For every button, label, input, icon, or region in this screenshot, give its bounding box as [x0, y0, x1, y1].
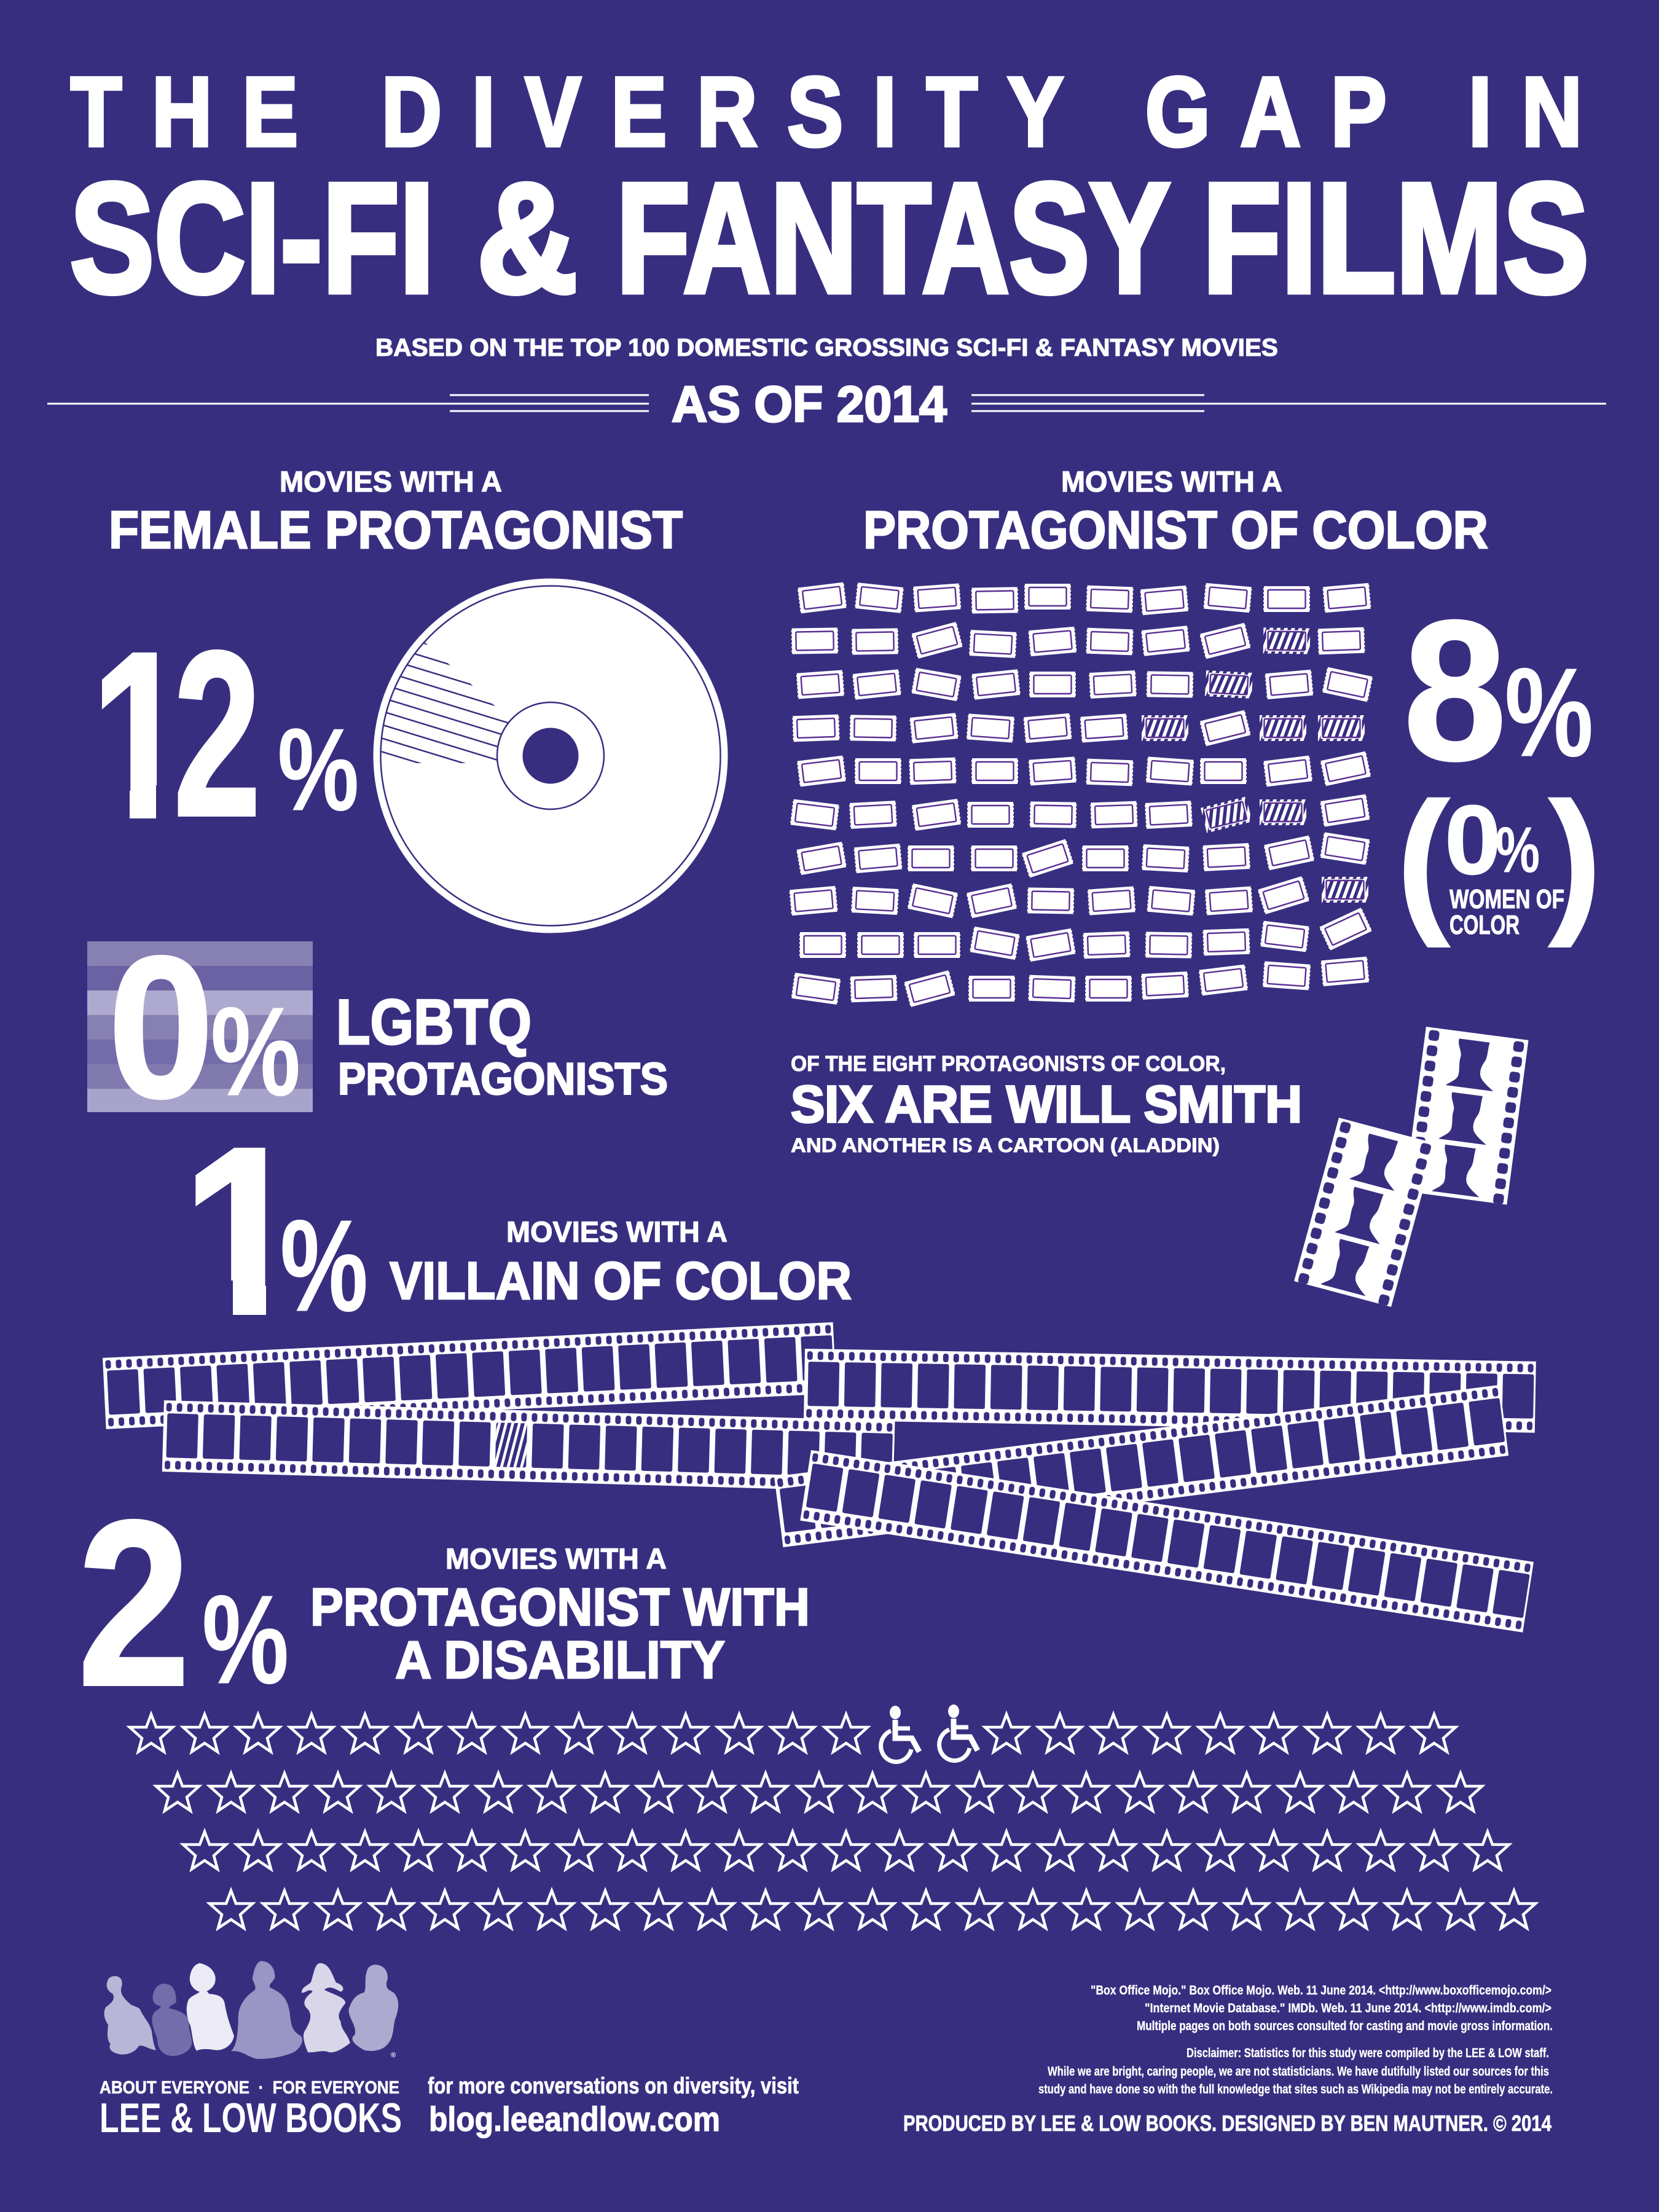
left parenthesis: ( — [1397, 770, 1451, 949]
stat: 2: 2 — [77, 1472, 190, 1735]
stat: percent: % — [202, 1569, 289, 1710]
panel: will smith callout — [791, 1027, 1529, 1307]
icon: film strip with silhouettes, upper — [1405, 1027, 1529, 1205]
icon: film strip with silhouettes, lower — [1294, 1118, 1436, 1307]
heading: movies with a: MOVIES WITH A — [506, 1215, 728, 1248]
footer right — [903, 1983, 1553, 2136]
heading: protagonist with: PROTAGONIST WITH — [310, 1578, 810, 1637]
sources: Multiple pages on both sources consulted for casting and movie gross information. — [1137, 2019, 1553, 2033]
stat: 2 of 12: 2 — [173, 602, 261, 866]
film strip falling — [800, 1450, 1534, 1633]
date line: AS OF 2014 — [672, 375, 947, 433]
panel: LGBTQ protagonists — [87, 914, 668, 1140]
heading: protagonist of color: PROTAGONIST OF COLOR — [863, 501, 1488, 560]
star grid: 100 movies — [130, 1714, 1535, 1928]
stat: percent: % — [1496, 814, 1540, 886]
panel: protagonist of color — [789, 465, 1602, 1007]
stat: 1: 1 — [183, 1099, 303, 1363]
label: color: COLOR — [1449, 910, 1520, 940]
right parenthesis: ) — [1548, 770, 1602, 949]
title line 2: SCI-FI — [70, 151, 434, 325]
title line 2: FILMS — [1202, 151, 1589, 325]
stat: 0 women of color: 0 — [1445, 785, 1501, 895]
label: LGBTQ: LGBTQ — [336, 987, 531, 1058]
registered mark: ® — [391, 2052, 396, 2059]
tagline: ABOUT EVERYONE · FOR EVERYONE — [100, 2078, 399, 2098]
label: protagonists: PROTAGONISTS — [338, 1054, 668, 1104]
panel: protagonist with a disability — [77, 1472, 1535, 1928]
heading: movies with a: MOVIES WITH A — [280, 465, 502, 498]
sources: "Internet Movie Database." IMDb. Web. 11 June 2014. <http://www.imdb.com/> — [1145, 2001, 1551, 2015]
website: blog.leeandlow.com — [429, 2100, 720, 2138]
stat: 0: 0 — [108, 914, 214, 1140]
title line 2: & — [477, 151, 578, 325]
stat: percent sign: % — [278, 705, 359, 835]
stat: 1 of 12: 1 — [92, 603, 187, 867]
heading: movies with a: MOVIES WITH A — [445, 1542, 667, 1575]
publisher name: LEE & LOW BOOKS — [100, 2095, 402, 2141]
label: women of: WOMEN OF — [1449, 884, 1564, 914]
panel: female protagonist — [92, 465, 728, 933]
title line 1: THE DIVERSITY GAP IN — [71, 58, 1582, 167]
film strip rising — [774, 1385, 1508, 1547]
title line 2 — [70, 151, 1589, 325]
film strip top left — [103, 1322, 836, 1429]
callout line 2: SIX ARE WILL SMITH — [791, 1075, 1302, 1133]
icon: disc with 12 percent hatched — [374, 579, 728, 933]
film strip middle with one hatched frame — [162, 1400, 895, 1492]
stat: percent: % — [211, 981, 300, 1122]
footer left — [100, 2052, 799, 2141]
icon: wheelchair — [939, 1704, 978, 1760]
stat: percent: % — [1505, 642, 1593, 783]
film strips: villains — [103, 1322, 1536, 1633]
title line 2: FANTASY — [616, 151, 1170, 325]
striped square — [87, 941, 313, 1112]
heading: female protagonist: FEMALE PROTAGONIST — [109, 501, 683, 560]
panel: villain of color — [183, 1099, 852, 1363]
logo: lee and low silhouettes — [104, 1961, 398, 2059]
disclaimer: Disclaimer: Statistics for this study were compiled by the LEE & LOW staff. — [1186, 2046, 1549, 2060]
ticket grid: 100 movies, 8 hatched — [789, 582, 1373, 1007]
icon: wheelchair — [881, 1706, 919, 1762]
callout line 1: OF THE EIGHT PROTAGONISTS OF COLOR, — [791, 1052, 1226, 1076]
title block — [70, 58, 1589, 433]
heading: movies with a: MOVIES WITH A — [1061, 465, 1282, 498]
stat: percent: % — [280, 1193, 368, 1338]
callout line 3: AND ANOTHER IS A CARTOON (ALADDIN) — [791, 1134, 1220, 1156]
sources — [1091, 1983, 1553, 2033]
film strip top right — [804, 1349, 1536, 1433]
sources: "Box Office Mojo." Box Office Mojo. Web. 11 June 2014. <http://www.boxofficemojo.com/> — [1091, 1983, 1551, 1998]
heading: villain of color: VILLAIN OF COLOR — [390, 1252, 852, 1311]
heading: a disability: A DISABILITY — [395, 1631, 725, 1690]
stat: 8: 8 — [1403, 579, 1507, 802]
disclaimer — [1038, 2046, 1553, 2096]
subtitle: BASED ON THE TOP 100 DOMESTIC GROSSING SCI-FI & FANTASY MOVIES — [375, 334, 1278, 361]
call to action: for more conversations on diversity, visit — [428, 2073, 799, 2098]
